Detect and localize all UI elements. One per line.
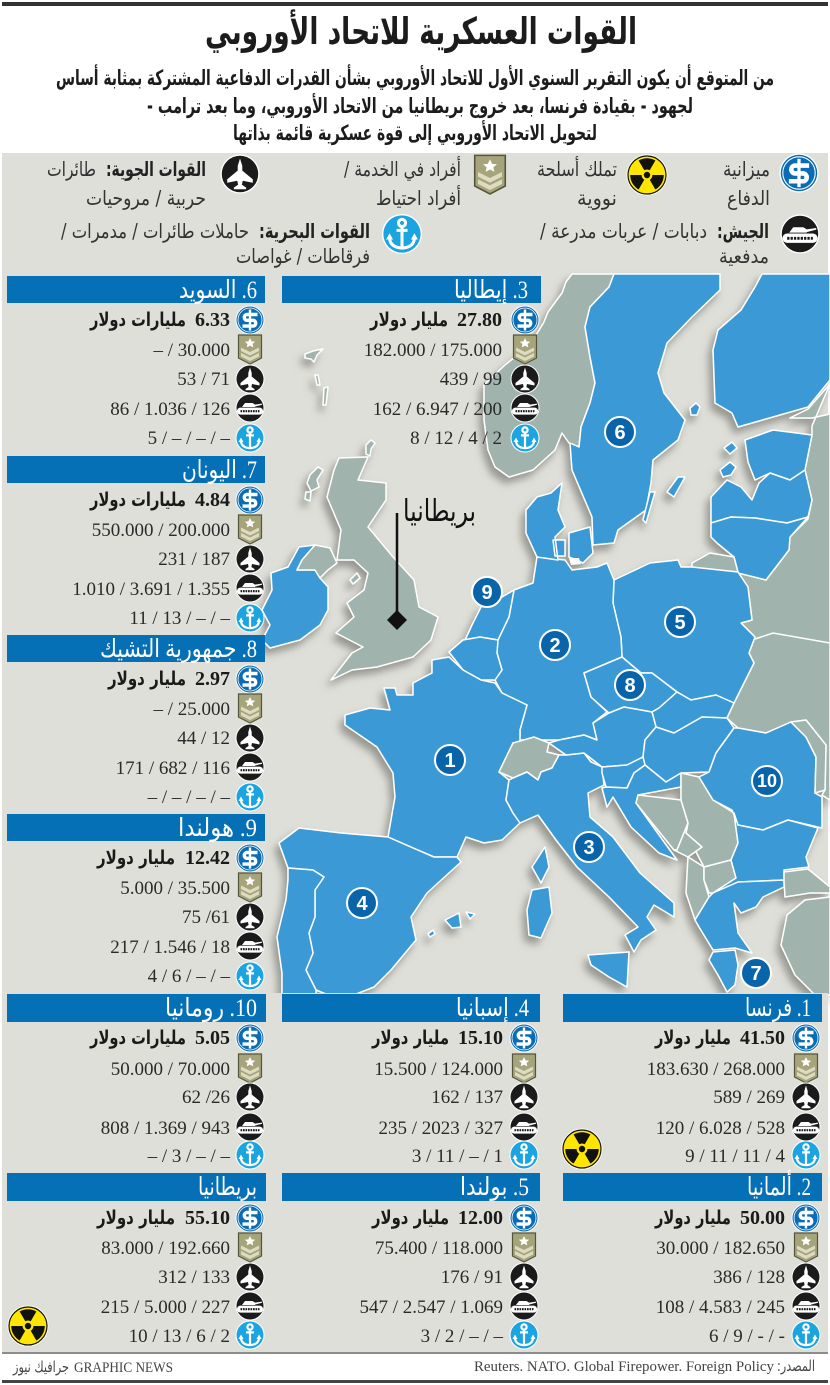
heading: 4. إسبانيا	[456, 995, 529, 1023]
army: 547 / 2.547 / 1.069	[359, 1297, 503, 1318]
legend: nuclear weapons	[537, 154, 668, 210]
navy	[410, 424, 540, 452]
Turkey in Europe	[784, 869, 830, 897]
panel: Britain	[7, 1173, 266, 1350]
bottom panel background	[2, 993, 828, 1353]
Estonia	[745, 430, 812, 480]
budget: 27.80	[457, 309, 502, 331]
personnel	[656, 1233, 818, 1262]
personnel: – / 25.000	[152, 699, 230, 720]
personnel	[647, 1054, 818, 1083]
budget	[654, 1024, 820, 1052]
navy	[421, 1320, 538, 1350]
army	[110, 932, 264, 960]
heading	[7, 994, 266, 1023]
air force: 162 / 137	[431, 1087, 503, 1108]
Slovenia	[602, 757, 645, 788]
Austria	[549, 707, 656, 767]
Finland	[713, 274, 830, 427]
army: 171 / 682 / 116	[116, 758, 230, 779]
bottom rule	[2, 1380, 828, 1383]
personnel	[364, 335, 536, 364]
Bosnia	[636, 795, 688, 850]
air force: 75 /61	[182, 907, 230, 928]
legend: personnel: أفراد احتياط	[376, 185, 461, 210]
budget: 12.42	[185, 847, 230, 869]
air force: 62 /26	[182, 1087, 230, 1108]
Montenegro	[674, 823, 702, 857]
budget: مليار دولار	[371, 1207, 449, 1229]
heading: بريطانيا	[198, 1174, 257, 1201]
personnel: 30.000 / 182.650	[656, 1238, 785, 1259]
navy: 6 / 9 / - / -	[709, 1326, 785, 1347]
marker 6: 6	[614, 422, 626, 444]
legend: army: الجيش:	[717, 219, 769, 243]
North Macedonia	[704, 860, 736, 893]
air force	[713, 1082, 820, 1112]
army	[101, 1112, 264, 1142]
Latvia	[711, 470, 812, 523]
personnel	[152, 335, 262, 364]
personnel: – / 30.000	[152, 340, 230, 361]
budget: 6.33	[195, 309, 230, 331]
marker 9	[472, 577, 502, 607]
budget: مليارات دولار	[89, 489, 186, 511]
panel: Italy	[282, 276, 541, 452]
marker 6	[605, 417, 635, 447]
nuclear icon	[562, 1128, 602, 1170]
marker 2: 2	[549, 635, 561, 657]
air force	[441, 1262, 538, 1292]
budget: 4.84	[195, 489, 230, 511]
Northern Ireland	[297, 545, 337, 578]
marker 8: 8	[624, 675, 636, 697]
panel: France	[562, 994, 822, 1170]
Lithuania	[711, 517, 808, 580]
panel: Czech Republic	[7, 635, 265, 812]
air force	[431, 1082, 538, 1112]
budget: مليار دولار	[654, 1207, 731, 1229]
personnel: 183.630 / 268.000	[647, 1059, 785, 1080]
budget	[89, 306, 264, 334]
marker 3: 3	[583, 837, 595, 859]
legend: personnel	[344, 155, 505, 210]
Greece mainland	[695, 880, 784, 953]
marker 10: 10	[757, 771, 777, 791]
heading: 1. فرنسا	[745, 995, 811, 1022]
Serbia	[681, 773, 738, 867]
legend: defence budget: ميزانية	[723, 157, 770, 181]
panel: Romania	[7, 994, 266, 1170]
France	[345, 657, 527, 857]
Great Britain	[327, 457, 438, 680]
Poland	[613, 560, 755, 703]
heading	[7, 635, 265, 664]
personnel	[374, 1054, 536, 1083]
marker 5: 5	[674, 612, 686, 634]
navy: 10 / 13 / 6 / 2	[129, 1326, 230, 1347]
Denmark	[526, 483, 593, 563]
navy	[148, 424, 264, 452]
army: 235 / 2023 / 327	[378, 1118, 503, 1139]
panel: Netherlands	[7, 814, 265, 990]
army: 162 / 6.947 / 200	[373, 399, 502, 420]
marker 9: 9	[481, 582, 493, 604]
personnel	[92, 515, 262, 544]
navy: 5 / – / – / –	[148, 428, 230, 449]
legend: air force	[47, 154, 260, 210]
Czech Republic	[584, 657, 677, 713]
legend: navy: حاملات طائرات / مدمرات /	[61, 219, 249, 243]
panel: Spain	[282, 994, 540, 1170]
Ireland	[262, 545, 328, 648]
marker 3	[574, 832, 604, 862]
navy: 3 / 2 / – / –	[421, 1326, 503, 1347]
budget: 41.50	[740, 1027, 785, 1049]
budget: 12.00	[458, 1207, 503, 1229]
navy	[129, 1320, 264, 1350]
legend: air force: حربية / مروحيات	[86, 186, 206, 210]
footer rule	[2, 1352, 828, 1354]
Belgium	[449, 637, 502, 680]
Sardinia	[527, 887, 552, 938]
personnel: 50.000 / 70.000	[111, 1059, 230, 1080]
panel: Poland	[282, 1173, 540, 1350]
marker 2	[540, 630, 570, 660]
budget: 2.97	[195, 668, 230, 690]
navy	[129, 604, 264, 632]
budget	[107, 664, 264, 694]
panel: Sweden	[7, 276, 265, 452]
navy: 11 / 13 / – / –	[129, 608, 230, 629]
credit	[12, 1358, 173, 1376]
marker 1: 1	[444, 750, 456, 772]
heading	[7, 814, 265, 842]
legend: air force: طائرات	[47, 157, 96, 181]
heading: 2. ألمانيا	[747, 1169, 811, 1201]
marker 10	[752, 766, 782, 796]
personnel: 83.000 / 192.660	[101, 1238, 230, 1259]
legend: air force: القوات الجوية:	[106, 157, 206, 181]
panel: Germany	[563, 1169, 822, 1350]
navy: 4 / 6 / – / –	[148, 966, 230, 987]
Peloponnese	[709, 950, 738, 992]
budget	[654, 1204, 820, 1232]
budget: مليار دولار	[96, 847, 175, 869]
air force: 589 / 269	[713, 1087, 785, 1108]
budget	[96, 1204, 264, 1232]
budget	[96, 844, 264, 872]
heading: 9. هولندا	[178, 815, 257, 842]
source: المصدر:	[777, 1357, 815, 1375]
legend: defence budget: الدفاع	[727, 186, 770, 210]
legend	[47, 153, 820, 268]
Scottish islands	[305, 467, 360, 584]
marker 4: 4	[356, 893, 368, 915]
air force: 439 / 99	[440, 369, 502, 390]
personnel	[375, 1233, 536, 1262]
air force: 44 / 12	[177, 728, 230, 749]
Bulgaria	[713, 813, 818, 893]
Britain pointer	[387, 513, 407, 630]
army	[101, 1292, 264, 1320]
heading	[563, 1169, 822, 1201]
Corsica	[532, 847, 549, 883]
Portugal	[277, 868, 324, 1000]
Sweden	[570, 274, 720, 545]
army	[378, 1112, 538, 1142]
navy	[412, 1140, 538, 1170]
navy	[147, 1140, 264, 1170]
legend: navy: فرقاطات / غواصات	[236, 244, 370, 268]
Kaliningrad	[692, 553, 738, 572]
air force	[177, 364, 264, 394]
Estonian islands	[720, 442, 737, 477]
panel: Greece	[7, 456, 265, 632]
navy: 8 / 12 / 4 / 2	[410, 428, 502, 449]
credit: جرافيك نيوز	[12, 1358, 69, 1376]
budget	[89, 486, 264, 514]
budget: 55.10	[185, 1207, 230, 1229]
personnel: 182.000 / 175.000	[364, 340, 502, 361]
army	[116, 752, 264, 782]
budget	[369, 306, 540, 334]
marker 4	[347, 888, 377, 918]
Balearic Islands	[428, 912, 475, 937]
heading: 8. جمهورية التشيك	[100, 636, 257, 664]
credit: GRAPHIC NEWS	[74, 1360, 173, 1376]
navy	[709, 1320, 820, 1350]
air force	[158, 544, 264, 574]
legend: army: مدفعية	[719, 244, 769, 268]
legend: navy: القوات البحرية:	[259, 219, 370, 243]
personnel: 5.000 / 35.500	[120, 878, 230, 899]
budget: مليار دولار	[369, 309, 448, 331]
air force	[440, 364, 540, 394]
Belarus border	[752, 633, 830, 643]
budget: مليار دولار	[654, 1027, 731, 1049]
navy: 9 / 11 / 11 / 4	[685, 1146, 785, 1167]
budget	[371, 1204, 538, 1232]
Switzerland	[499, 737, 559, 780]
personnel	[111, 1054, 262, 1083]
Lolland	[569, 558, 581, 565]
map of Europe	[262, 274, 830, 1000]
Germany	[495, 557, 622, 740]
army	[373, 394, 540, 422]
personnel: 75.400 / 118.000	[375, 1238, 503, 1259]
intro text	[56, 63, 774, 145]
Shetland and Orkney	[305, 349, 375, 456]
heading	[282, 1173, 540, 1201]
air force	[713, 1262, 820, 1292]
heading	[7, 1173, 266, 1201]
personnel	[101, 1233, 262, 1262]
heading	[563, 994, 822, 1022]
title: القوات العسكرية للاتحاد الأوروبي	[205, 8, 637, 53]
personnel	[120, 873, 262, 902]
legend: defence budget	[723, 153, 819, 210]
Italy	[506, 753, 674, 952]
Romania	[699, 722, 822, 830]
marker 7	[741, 958, 771, 988]
heading: 3. إيطاليا	[454, 277, 528, 305]
budget: مليار دولار	[107, 668, 186, 690]
budget	[371, 1024, 538, 1052]
legend: army: دبابات / عربات مدرعة /	[540, 219, 707, 243]
personnel: 550.000 / 200.000	[92, 520, 230, 541]
Moldova	[791, 720, 826, 793]
personnel	[152, 694, 262, 723]
budget: مليارات دولار	[89, 309, 186, 331]
army	[656, 1112, 820, 1142]
army: 217 / 1.546 / 18	[110, 937, 230, 958]
marker 1	[435, 745, 465, 775]
legend: nuclear weapons: نووية	[577, 186, 617, 210]
army	[359, 1292, 538, 1320]
budget: مليار دولار	[96, 1207, 175, 1229]
Albania	[686, 857, 709, 920]
army: 215 / 5.000 / 227	[101, 1297, 230, 1318]
air force	[177, 724, 264, 752]
army	[72, 574, 264, 602]
navy	[148, 962, 264, 990]
heading: 10. رومانيا	[165, 995, 257, 1023]
intro text: لتحويل الاتحاد الأوروبي إلى قوة عسكرية قائمة بذاتها	[233, 119, 597, 145]
legend: navy	[61, 214, 422, 268]
budget: مليار دولار	[371, 1027, 449, 1049]
navy: – / 3 / – / –	[147, 1146, 230, 1167]
navy: 3 / 11 / – / 1	[412, 1146, 503, 1167]
budget: مليارات دولار	[89, 1027, 186, 1049]
air force: 53 / 71	[177, 369, 230, 390]
budget: 50.00	[740, 1207, 785, 1229]
heading	[282, 994, 540, 1023]
army: 108 / 4.583 / 245	[656, 1297, 785, 1318]
navy	[685, 1140, 820, 1170]
marker 5	[665, 607, 695, 637]
air force	[158, 1262, 264, 1292]
top rule	[2, 2, 828, 6]
air force: 176 / 91	[441, 1267, 503, 1288]
air force: 386 / 128	[713, 1267, 785, 1288]
Sicily	[588, 952, 629, 987]
map markers	[347, 417, 782, 988]
heading	[7, 456, 265, 484]
air force	[182, 1082, 264, 1112]
legend: army	[540, 214, 820, 268]
army: 1.010 / 3.691 / 1.355	[72, 579, 230, 600]
navy	[147, 782, 264, 812]
heading	[7, 276, 265, 304]
army	[110, 394, 264, 422]
budget: 15.10	[458, 1027, 503, 1049]
heading	[282, 276, 541, 305]
Norway	[484, 274, 614, 477]
Swedish islands	[643, 403, 700, 523]
air force: 312 / 133	[158, 1267, 230, 1288]
marker 8	[615, 670, 645, 700]
heading: 5. بولندا	[460, 1174, 529, 1201]
heading: 6. السويد	[179, 277, 257, 304]
budget	[89, 1024, 264, 1052]
air force: 231 / 187	[158, 549, 230, 570]
Spain	[279, 828, 461, 1000]
legend: personnel: أفراد في الخدمة /	[344, 156, 461, 182]
Slovakia	[652, 692, 734, 733]
Russia and Belarus and Ukraine	[727, 384, 830, 800]
army: 86 / 1.036 / 126	[110, 399, 230, 420]
Croatia	[602, 765, 681, 860]
army	[656, 1292, 820, 1320]
navy: – / – / – / –	[147, 787, 230, 808]
heading: 7. اليونان	[182, 457, 257, 484]
nuclear icon	[8, 1306, 48, 1346]
Turkey	[781, 897, 830, 995]
legend: nuclear weapons: تملك أسلحة	[537, 156, 617, 181]
Hungary	[643, 717, 734, 782]
personnel: 15.500 / 124.000	[374, 1059, 503, 1080]
marker 7: 7	[750, 963, 762, 985]
budget: 5.05	[195, 1027, 230, 1049]
army: 120 / 6.028 / 528	[656, 1118, 785, 1139]
air force	[182, 902, 264, 932]
Britain label: بريطانيا	[403, 494, 476, 529]
Netherlands	[465, 590, 514, 640]
army: 808 / 1.369 / 943	[101, 1118, 230, 1139]
source: Reuters. NATO. Global Firepower. Foreign Policy	[474, 1359, 774, 1375]
